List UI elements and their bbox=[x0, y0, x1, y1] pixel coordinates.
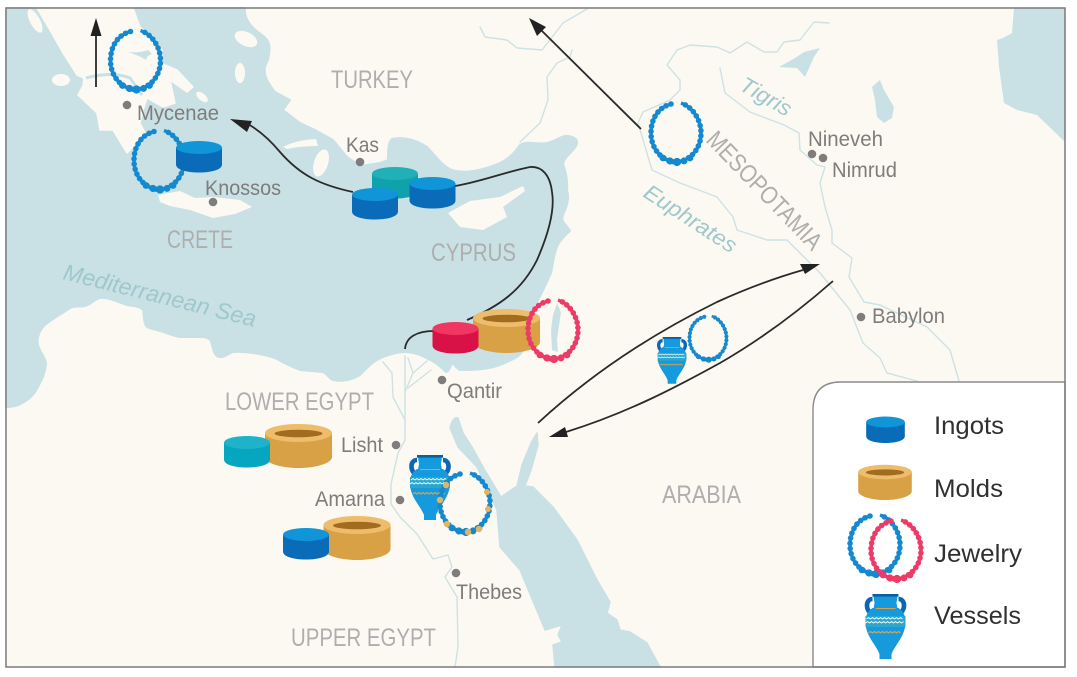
Thermaic Gulf bbox=[128, 50, 152, 60]
Lake Van bbox=[779, 48, 820, 77]
red ingot at Qantir bbox=[432, 322, 478, 354]
Gulf of Corinth bbox=[86, 74, 142, 95]
label: Crete: CRETE bbox=[167, 226, 233, 254]
jewelry below Mycenae bbox=[134, 130, 184, 194]
mold at Lisht bbox=[265, 424, 332, 468]
label: Cyprus: CYPRUS bbox=[431, 239, 516, 267]
Lake Urmia bbox=[872, 80, 894, 123]
Mediterranean Sea water body bbox=[6, 8, 577, 407]
blue ingot near Kas, right bbox=[410, 177, 456, 208]
legend icon: mold bbox=[858, 465, 912, 500]
city: Kas bbox=[346, 134, 379, 166]
label: Upper Egypt: UPPER EGYPT bbox=[291, 624, 436, 652]
Red Sea and gulfs bbox=[450, 418, 660, 667]
legend label: Molds: Molds bbox=[934, 475, 1003, 503]
pink jewelry near Sinai bbox=[528, 300, 578, 363]
arrow: Sinai to Mesopotamia bbox=[538, 264, 820, 423]
traded vessel between arrows bbox=[658, 337, 686, 384]
teal ingot at Lisht bbox=[224, 436, 270, 468]
mold at Qantir bbox=[473, 309, 540, 353]
mold at Amarna bbox=[324, 516, 390, 560]
route: Egypt through Cyprus to Kas bbox=[405, 167, 553, 349]
city: Kas: Kas bbox=[346, 134, 379, 157]
Dead Sea bbox=[551, 303, 561, 352]
legend label: Jewelry: Jewelry bbox=[934, 540, 1023, 568]
city: Mycenae: Mycenae bbox=[137, 102, 219, 125]
teal ingot near Kas bbox=[372, 167, 418, 198]
label: Tigris: Tigris bbox=[736, 72, 796, 121]
legend panel bbox=[813, 382, 1065, 667]
arrow: Mesopotamia to Sinai bbox=[549, 281, 833, 437]
city: Thebes bbox=[452, 569, 522, 604]
blue ingot near Kas, left bbox=[352, 188, 398, 220]
region labels bbox=[167, 66, 828, 652]
traded jewelry between arrows bbox=[690, 316, 726, 363]
city: Babylon: Babylon bbox=[872, 305, 945, 328]
Crete bbox=[158, 191, 252, 218]
legend label: Vessels: Vessels bbox=[934, 602, 1021, 630]
city: Qantir: Qantir bbox=[447, 380, 502, 403]
water labels bbox=[61, 72, 796, 332]
label: Lower Egypt: LOWER EGYPT bbox=[225, 388, 374, 416]
city: Thebes: Thebes bbox=[456, 581, 522, 604]
label: Mediterranean Sea: Mediterranean Sea bbox=[61, 259, 259, 332]
city: Knossos: Knossos bbox=[205, 177, 281, 200]
arrow: Kas to Mycenae bbox=[230, 119, 353, 192]
legend icon: ingot bbox=[866, 417, 905, 443]
label: Arabia: ARABIA bbox=[662, 481, 741, 509]
city: Amarna: Amarna bbox=[315, 488, 385, 511]
label: Turkey: TURKEY bbox=[331, 66, 413, 94]
legend label: Ingots: Ingots bbox=[934, 412, 1004, 440]
city: Nimrud: Nimrud bbox=[832, 159, 897, 182]
legend icon: vessel bbox=[866, 594, 906, 659]
city: Nimrud bbox=[819, 154, 897, 182]
label: Euphrates: Euphrates bbox=[639, 179, 742, 258]
Greece landmass bbox=[37, 8, 193, 153]
arrow: Mesopotamia to Turkey bbox=[529, 18, 641, 129]
blue ingot at Amarna bbox=[283, 528, 329, 560]
arrow: north from Greece bbox=[90, 18, 102, 87]
jewelry above Mycenae bbox=[110, 30, 160, 94]
jewelry in Mesopotamia bbox=[651, 103, 701, 166]
label: Mesopotamia: MESOPOTAMIA bbox=[701, 126, 828, 256]
Cyprus bbox=[448, 186, 525, 230]
city: Lisht: Lisht bbox=[341, 434, 383, 457]
legend icon: jewelry bbox=[850, 515, 921, 583]
Aegean islands bbox=[24, 7, 332, 178]
jewelry with gold beads at Amarna bbox=[437, 473, 491, 536]
Persian Gulf bbox=[997, 8, 1065, 142]
city: Nineveh: Nineveh bbox=[808, 128, 883, 151]
ingot at Mycenae bbox=[176, 141, 222, 172]
rivers bbox=[383, 9, 959, 667]
vessel at Amarna bbox=[410, 455, 450, 520]
